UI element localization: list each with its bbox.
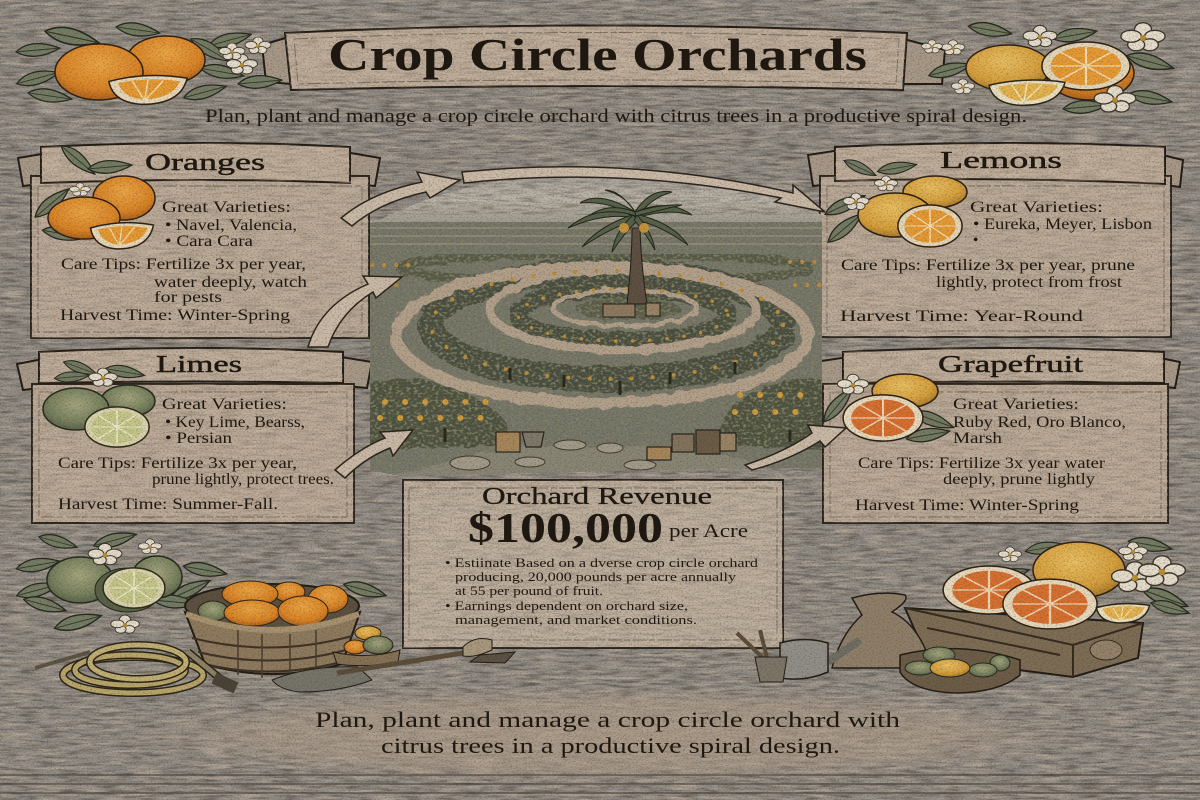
basket of oranges (185, 581, 360, 678)
text block: lemons (840, 148, 1152, 325)
revenue unit: per Acre (669, 521, 748, 542)
fruit: grapefruit panel (819, 374, 956, 445)
panel: oranges (18, 143, 380, 338)
bullet 1 line 2: producing, 20,000 pounds per acre annually (455, 569, 737, 584)
bottom stripes (0, 770, 1200, 800)
fruit and tools: bottom right (737, 535, 1191, 693)
heading: limes: Limes (156, 352, 242, 378)
clouds (398, 178, 815, 215)
bullet 1 line 1: • Estiinate Based on a dverse crop circle orchard (445, 555, 759, 570)
harvest time: Harvest Time: Summer-Fall. (58, 496, 278, 513)
footer line 1: Plan, plant and manage a crop circle orchard with (315, 707, 900, 732)
variety line 2: Marsh (953, 430, 1002, 447)
text block: grapefruit (855, 352, 1126, 514)
variety line 2: • Persian (165, 430, 232, 447)
varieties: Great Varieties: (162, 396, 287, 413)
fruit: lemons panel (822, 156, 967, 247)
bullet 2 line 1: • Earnings dependent on orchard size, (445, 598, 688, 613)
fruit and tools: bottom left (15, 528, 515, 693)
bowl of limes (900, 647, 1020, 693)
ground (370, 222, 822, 477)
footer text (315, 707, 900, 758)
care tips line 2: deeply, prune lightly (943, 471, 1095, 488)
bullet 1 line 3: at 55 per pound of fruit. (455, 583, 603, 598)
arrow: arc to lemons (462, 167, 825, 212)
heading: grapefruit: Grapefruit (938, 352, 1083, 378)
variety line 1: • Key Lime, Bearss, (165, 414, 305, 431)
watering can (780, 640, 860, 679)
footer line 2: citrus trees in a productive spiral design. (381, 733, 840, 758)
stones (450, 440, 656, 470)
small fruit bowl (333, 626, 400, 666)
varieties: Great Varieties: (953, 396, 1079, 413)
heading: lemons: Lemons (940, 148, 1062, 174)
care tips line 2: prune lightly, protect trees. (152, 471, 334, 488)
arrow: oranges to scene (341, 172, 460, 226)
harvest time: Harvest Time: Year-Round (840, 308, 1083, 325)
care tips line 2: lightly, protect from frost (936, 274, 1123, 291)
arrow: limes to scene (308, 276, 402, 347)
panel grain texture (31, 26, 1171, 648)
tool pot (737, 630, 787, 682)
central palm tree (568, 190, 692, 317)
burlap sack (832, 593, 932, 668)
heading: oranges: Oranges (145, 150, 265, 176)
care tips: Care Tips: Fertilize 3x per year, prune (841, 257, 1135, 274)
care tips line 2: water deeply, watch (154, 274, 307, 291)
varieties: Great Varieties: (162, 199, 291, 216)
main title banner (262, 26, 945, 90)
spiral rows (370, 254, 822, 450)
fruit on trees (372, 262, 820, 418)
fruit: limes panel (43, 357, 155, 447)
garden hose (35, 645, 236, 693)
spiral paths (390, 267, 808, 476)
trowel (272, 639, 515, 692)
fruit: oranges panel (31, 141, 155, 249)
crates (496, 430, 736, 460)
harvest time: Harvest Time: Winter-Spring (855, 497, 1079, 514)
far fields (370, 228, 822, 244)
variety line 2: • (973, 232, 978, 249)
orchard scene with spiral rows (370, 160, 822, 477)
revenue figure: $100,000 (468, 506, 663, 552)
varieties: Great Varieties: (970, 199, 1103, 216)
panel: limes (17, 348, 372, 523)
arrows linking panels to scene (308, 167, 846, 478)
fruit: top left oranges (15, 21, 282, 105)
care tips line 3: for pests (154, 289, 222, 306)
variety line 2: • Cara Cara (165, 233, 253, 250)
panel: orchard revenue (403, 480, 783, 648)
text block: orchard revenue (445, 484, 759, 627)
text block: oranges (60, 150, 307, 324)
fruit: top right lemons (922, 20, 1175, 115)
subtitle: Plan, plant and manage a crop circle orchard with citrus trees in a productive spiral design. (205, 106, 1027, 127)
sky (373, 178, 822, 224)
harvest time: Harvest Time: Winter-Spring (60, 307, 290, 324)
care tips: Care Tips: Fertilize 3x per year, (58, 455, 297, 472)
footer warm band (125, 687, 1085, 783)
arrow: limes lower to scene (335, 430, 413, 478)
wooden crate (905, 608, 1143, 677)
arrow: revenue to grapefruit (745, 425, 846, 470)
revenue heading: Orchard Revenue (482, 484, 712, 510)
bullet 2 line 2: management, and market conditions. (455, 612, 697, 627)
title: Crop Circle Orchards (328, 29, 867, 80)
variety line 1: Ruby Red, Oro Blanco, (953, 414, 1126, 431)
variety line 1: • Navel, Valencia, (165, 217, 297, 234)
panel: lemons (808, 143, 1183, 337)
panel: grapefruit (815, 348, 1180, 523)
care tips: Care Tips: Fertilize 3x per year, (61, 256, 306, 273)
small tree trunks (445, 362, 790, 442)
variety line 1: • Eureka, Meyer, Lisbon (973, 216, 1152, 233)
care tips: Care Tips: Fertilize 3x year water (858, 455, 1106, 472)
text block: limes (58, 352, 334, 513)
